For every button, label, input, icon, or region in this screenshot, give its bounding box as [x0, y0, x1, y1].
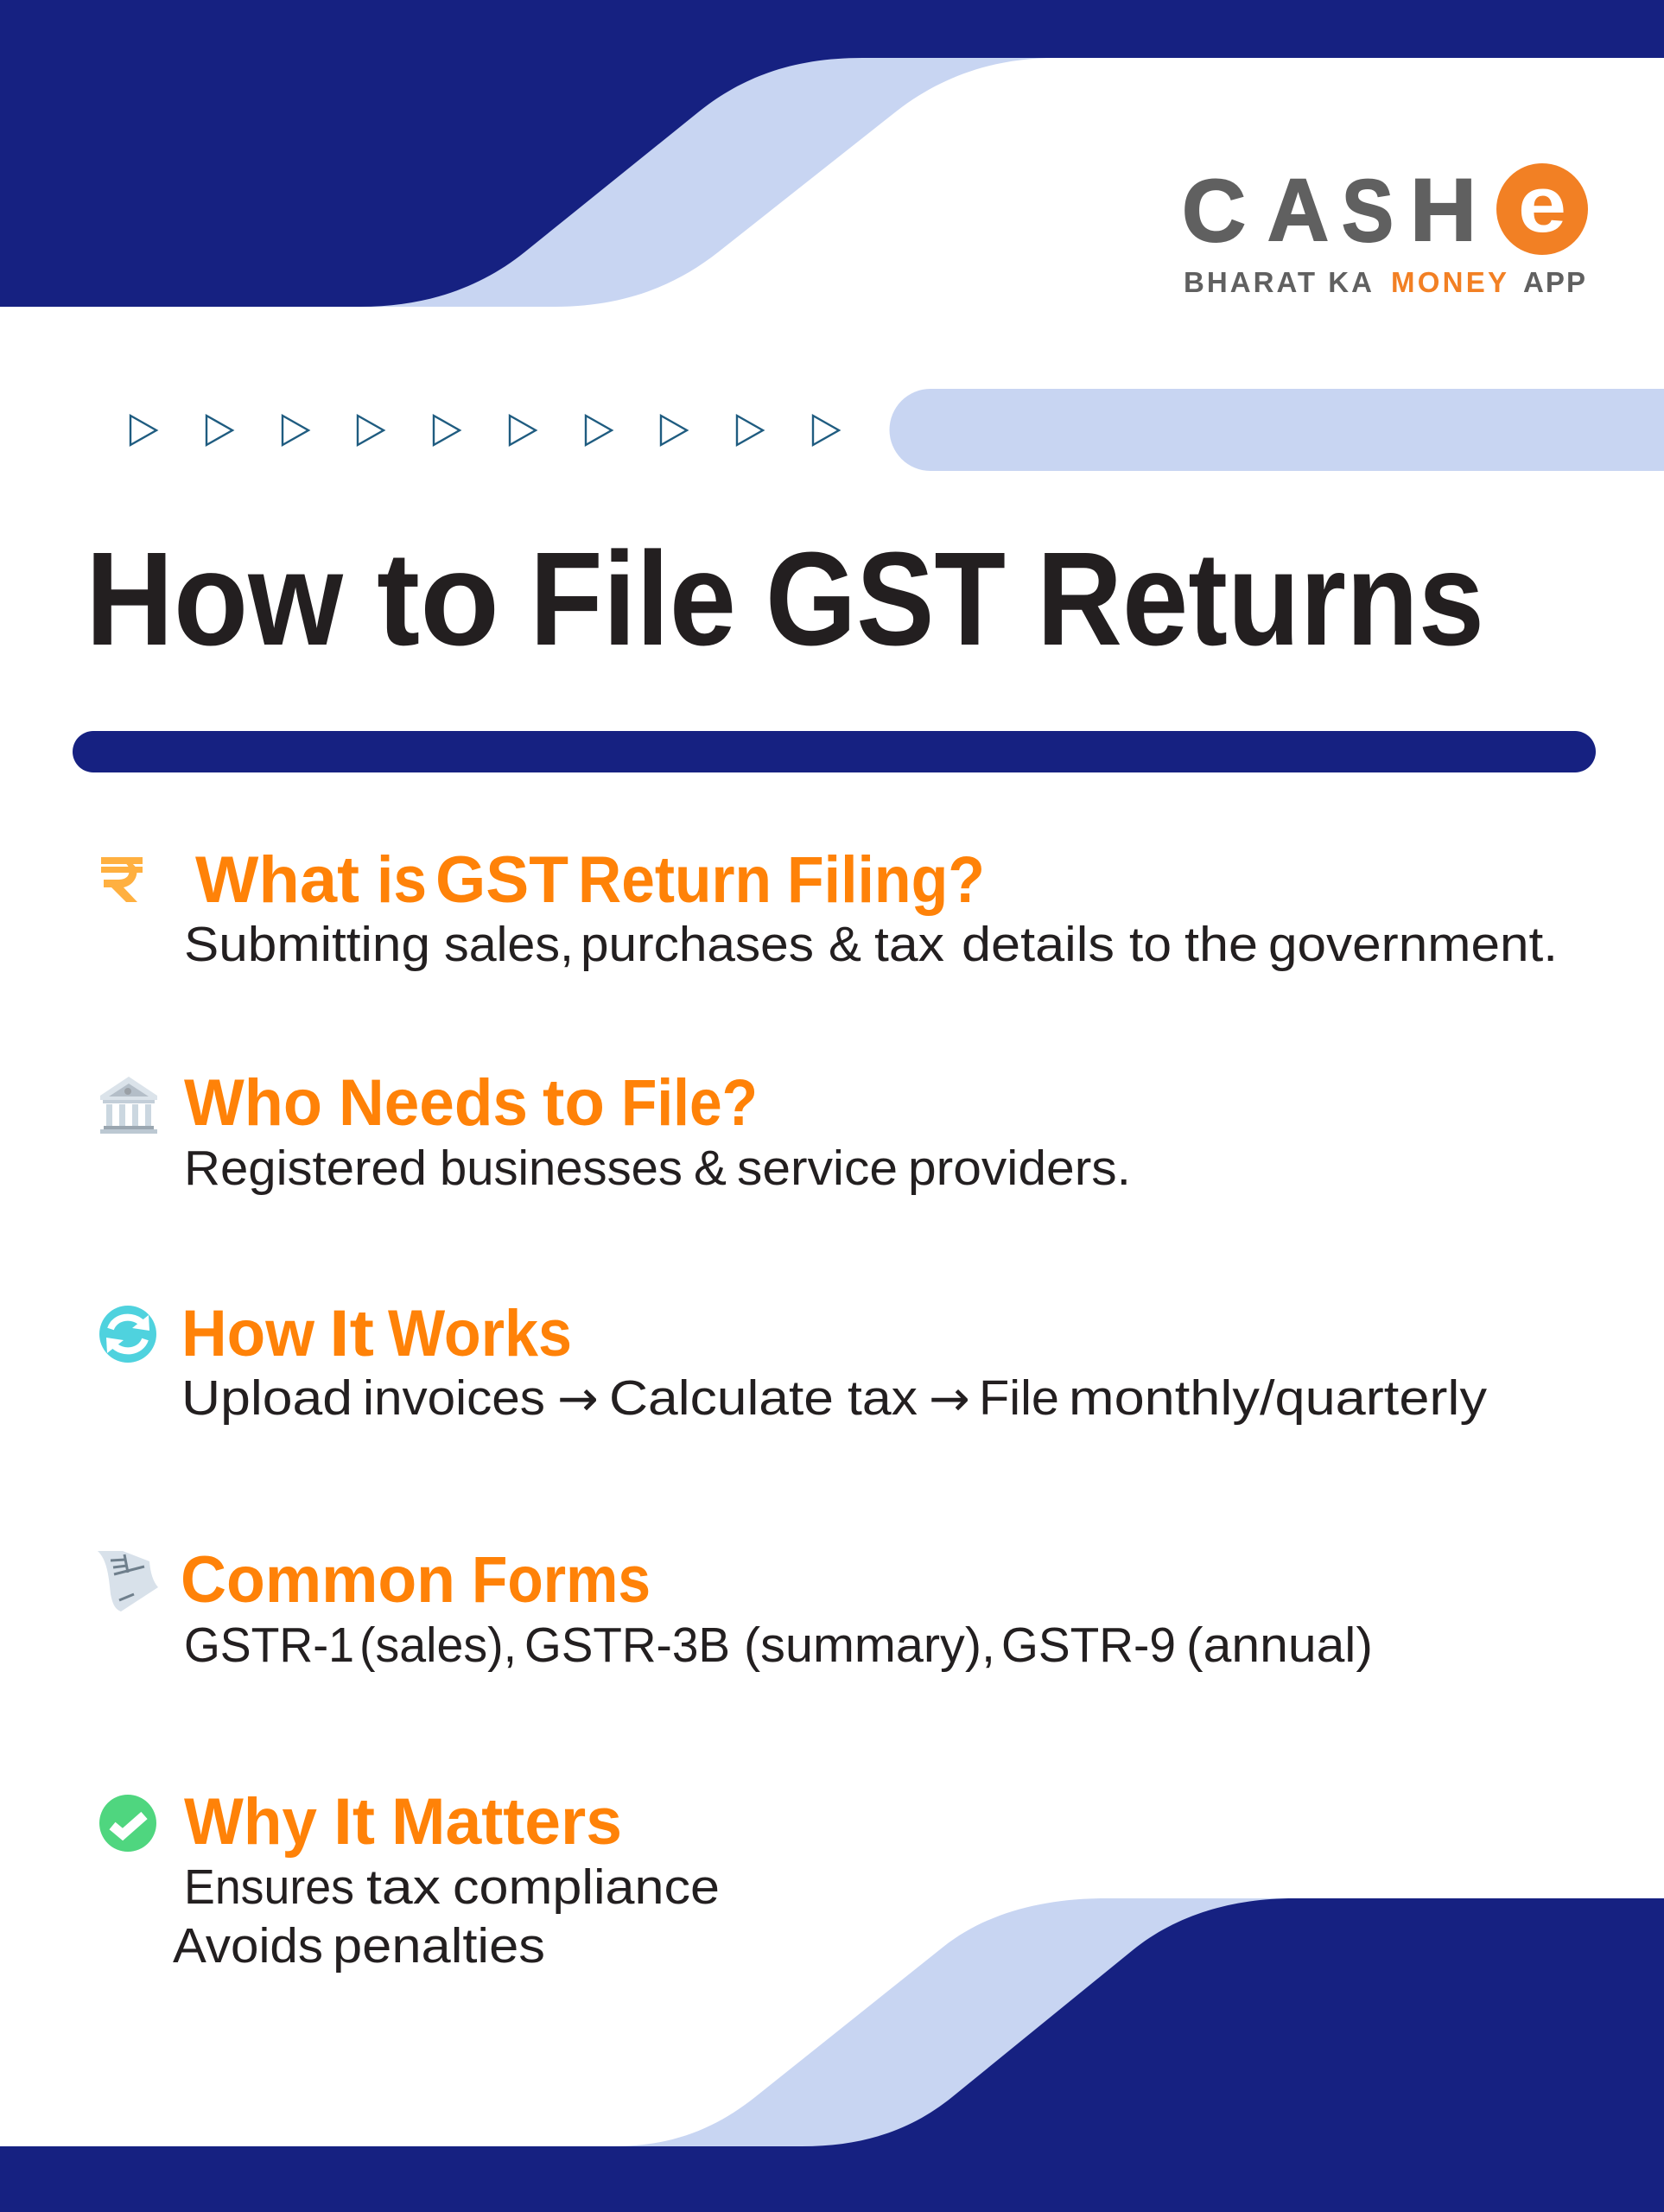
heading: what is GST return filing: GST	[435, 843, 568, 917]
text: who: &	[694, 1141, 727, 1196]
text: process: →	[929, 1370, 970, 1427]
text: avoids penalties	[173, 1918, 545, 1974]
title: Returns	[1037, 524, 1484, 673]
heading: how it works: Works	[388, 1297, 572, 1370]
heading: what is GST return filing: Filing?	[787, 843, 985, 917]
text: definition: to	[1129, 917, 1172, 972]
text: definition	[184, 917, 1558, 972]
heading: how it works	[181, 1297, 572, 1370]
logo: CASHe: S	[1342, 162, 1394, 260]
logo: CASHe: C	[1182, 162, 1246, 260]
logo: CASHe: APP	[1523, 266, 1585, 298]
text: forms: (annual)	[1186, 1618, 1373, 1673]
heading: why it matters: Why	[184, 1785, 317, 1859]
heading: what is GST return filing: What	[195, 843, 359, 917]
heading: who needs to file: Who	[184, 1066, 322, 1140]
text: definition: the	[1184, 917, 1258, 972]
logo: CASHe: A	[1267, 161, 1329, 259]
title: File	[530, 524, 736, 673]
text: definition: Submitting	[184, 917, 430, 972]
text: process: →	[557, 1370, 599, 1427]
text: process: tax	[848, 1370, 918, 1426]
heading: who needs to file: File?	[621, 1066, 758, 1140]
icon: refresh arrows	[99, 1306, 156, 1363]
icon: rupee symbol	[101, 857, 143, 902]
text: forms: GSTR-3B	[524, 1618, 730, 1673]
section: what is GST return filing	[101, 843, 1558, 972]
heading: why it matters	[184, 1785, 622, 1859]
text: definition: government.	[1268, 917, 1558, 972]
text: who	[184, 1141, 1131, 1196]
text: process: monthly/quarterly	[1069, 1370, 1488, 1426]
section: how it works	[99, 1297, 1488, 1427]
text: definition: &	[829, 917, 861, 972]
text: definition: sales,	[444, 917, 574, 972]
logo: CASHe	[1182, 161, 1588, 298]
heading: common forms	[181, 1543, 651, 1617]
text: avoids penalties: Avoids	[173, 1918, 323, 1974]
text: process: Upload	[181, 1370, 352, 1426]
text: ensures compliance: tax	[366, 1859, 441, 1915]
heading: who needs to file	[184, 1066, 758, 1140]
text: forms: GSTR-1	[184, 1618, 354, 1673]
text: process: Calculate	[609, 1370, 834, 1426]
text: ensures compliance: compliance	[453, 1859, 720, 1915]
text: ensures compliance	[184, 1859, 720, 1915]
text: who: Registered	[184, 1141, 427, 1196]
bottom wave decoration	[0, 1898, 1664, 2212]
section: why it matters	[99, 1785, 720, 1974]
heading: who needs to file: Needs	[339, 1066, 528, 1140]
title: How	[86, 524, 344, 673]
top wave decoration	[0, 0, 1664, 307]
text: definition: tax	[874, 917, 944, 972]
text: who: businesses	[440, 1141, 683, 1196]
text: definition: details	[962, 917, 1115, 972]
logo: CASHe: e	[1518, 161, 1566, 249]
heading: how it works: How	[181, 1297, 315, 1370]
heading: what is GST return filing: Return	[578, 843, 772, 917]
text: process	[181, 1370, 1488, 1427]
title: to	[377, 524, 499, 673]
text: definition: purchases	[581, 917, 814, 972]
text: process: invoices	[363, 1370, 545, 1426]
text: who: service	[737, 1141, 898, 1196]
icon: green check	[99, 1795, 156, 1852]
text: forms	[184, 1618, 1373, 1673]
heading: common forms: Forms	[472, 1543, 651, 1617]
logo: CASHe: BHARAT KA	[1184, 266, 1372, 298]
heading: common forms: Common	[181, 1543, 455, 1617]
heading: what is GST return filing	[195, 843, 985, 917]
text: forms: (sales),	[359, 1618, 517, 1673]
title	[86, 524, 1484, 673]
text: who: providers.	[908, 1141, 1131, 1196]
icon: document page	[98, 1551, 158, 1611]
text: avoids penalties: penalties	[333, 1918, 545, 1974]
logo: CASHe: H	[1410, 161, 1477, 259]
heading: what is GST return filing: is	[377, 843, 427, 917]
heading: who needs to file: to	[543, 1066, 605, 1140]
section: common forms	[98, 1543, 1373, 1673]
section: who needs to file	[100, 1066, 1131, 1196]
heading: why it matters: It	[333, 1785, 375, 1859]
light blue pill	[890, 389, 1664, 471]
icon: government bank building	[100, 1077, 157, 1134]
logo: CASHe: MONEY	[1391, 266, 1507, 298]
heading: why it matters: Matters	[391, 1785, 622, 1859]
text: forms: GSTR-9	[1001, 1618, 1176, 1673]
heading: how it works: It	[329, 1297, 374, 1370]
title: GST	[765, 524, 1006, 673]
divider bar	[73, 731, 1596, 772]
text: forms: (summary),	[744, 1618, 995, 1673]
row of outlined arrows	[130, 416, 839, 445]
text: process: File	[979, 1370, 1059, 1426]
text: ensures compliance: Ensures	[184, 1859, 354, 1915]
